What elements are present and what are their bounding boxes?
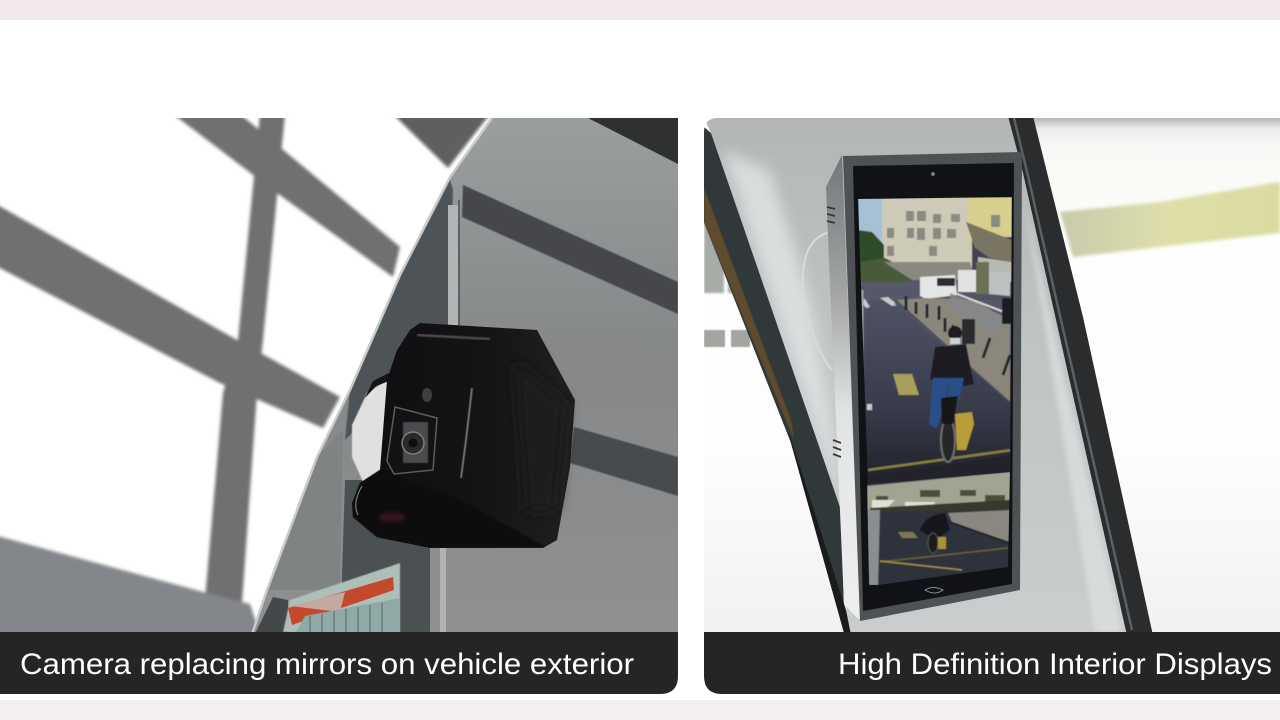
dark glazing bars bbox=[462, 185, 678, 314]
panel: exterior camera bbox=[0, 114, 678, 694]
grey lower glass triangle bbox=[268, 430, 343, 590]
caption text: Camera replacing mirrors on vehicle exterior bbox=[20, 648, 634, 681]
small sensor bbox=[422, 388, 432, 402]
pillar bbox=[704, 118, 1135, 640]
lane markings bbox=[893, 374, 919, 395]
panel: interior display bbox=[704, 116, 1280, 694]
sidewalk bbox=[897, 298, 1010, 402]
camera body bbox=[352, 323, 575, 548]
vehicle glass bbox=[250, 118, 678, 640]
bright glass edge bbox=[250, 118, 492, 640]
right dark strut bbox=[1008, 116, 1154, 640]
photo: display mounted on pillar bbox=[704, 116, 1280, 640]
left dark strut bbox=[704, 127, 852, 640]
caption bar: exterior bbox=[0, 632, 678, 694]
screen: main rear view bbox=[858, 197, 1012, 487]
dark glass beside pillar bbox=[345, 180, 453, 440]
parked van bbox=[920, 275, 957, 299]
device side bbox=[826, 155, 860, 620]
camera lens module bbox=[387, 407, 437, 474]
cyclist bbox=[929, 326, 974, 462]
window frame shadows bbox=[0, 114, 490, 640]
device frame bbox=[843, 152, 1022, 621]
caption text: High Definition Interior Displays bbox=[838, 648, 1272, 681]
bottom page band bbox=[0, 700, 1280, 720]
caption bar: interior bbox=[704, 632, 1280, 694]
railing bbox=[950, 293, 1004, 334]
photo: camera mounted on vehicle bbox=[0, 114, 678, 640]
icon: camera housing bbox=[352, 323, 575, 548]
icon: mirror display bbox=[826, 152, 1022, 621]
screen: lower wide view bbox=[867, 470, 1012, 588]
reflected sign bbox=[283, 563, 400, 632]
outside view: left window bbox=[704, 222, 745, 293]
top page band bbox=[0, 0, 1280, 20]
outside view: sky and hill bbox=[1034, 118, 1280, 145]
camera arm reflection bbox=[352, 378, 390, 482]
